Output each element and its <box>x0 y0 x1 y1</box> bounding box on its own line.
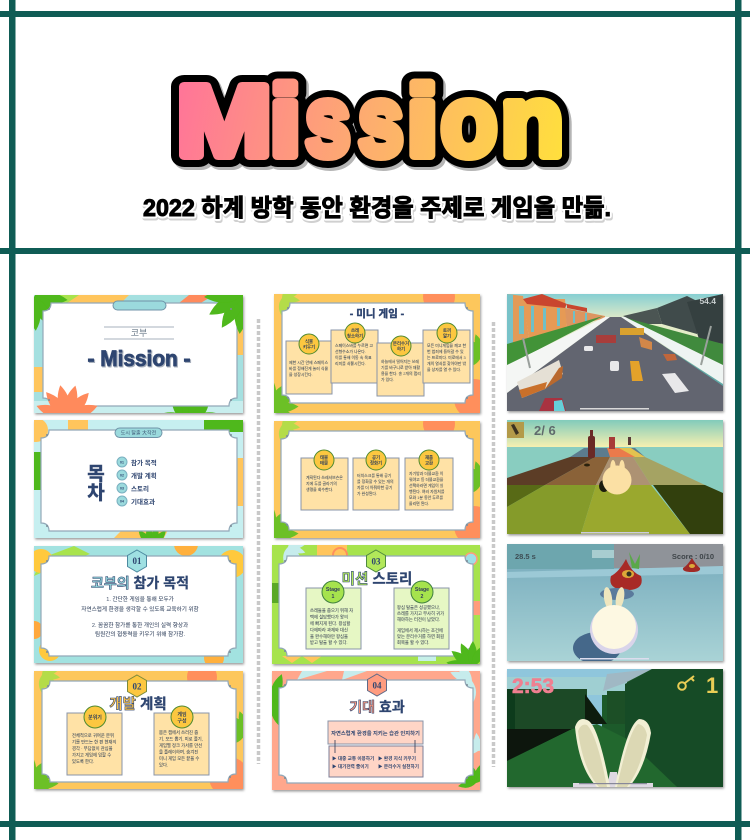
panel: mini game slide one: 이를 통해 이동 속 목표 <box>335 355 372 360</box>
screenshot: rabbit bottle game: 2/ 6 <box>534 423 556 438</box>
panel: mini game slide one: - 미니 게임 - <box>350 307 405 320</box>
panel: slide 03 mission story: Stage <box>415 587 429 593</box>
panel: mini game slide two: 올리면 된다. <box>409 501 429 506</box>
panel: slide 03 mission story: 을 완수해야만 왕심을 <box>310 633 348 640</box>
panel: slide 04 expected effect: ▶ 대중 교통 이용하기 <box>332 755 374 762</box>
panel: contents slide: 02 <box>120 474 124 478</box>
panel: cover slide: - Mission - <box>88 347 192 372</box>
panel: mini game slide one: 을 성장시킨다. <box>289 372 313 377</box>
panel: contents slide: 04 <box>120 500 124 504</box>
panel: slide 02 development plan: 을 플레이하며, 숨겨진 <box>159 748 198 756</box>
divider: right dotted line <box>492 322 495 767</box>
panel: slide 03 mission story: 2 <box>421 594 424 600</box>
panel: mini game slide one: 기를 바구니로 받아 재활 <box>381 365 420 370</box>
screenshot: city road game: 54.4 <box>699 296 716 306</box>
panel: slide 03 mission story: 게임에서 제시하는 조건에 <box>397 627 443 634</box>
panel: mini game slide one: 토끼 <box>443 327 451 334</box>
panel: slide 04 expected effect: 04 <box>372 680 382 690</box>
screenshot: maze game <box>507 669 723 787</box>
panel: contents slide: 차 <box>87 482 105 504</box>
panel: mini game slide two: 를 정화할 수 있는 개의 <box>357 479 394 484</box>
panel: slide 04 expected effect: ▶ 환경 지식 키우기 <box>378 755 416 762</box>
panel: slide 03 mission story: 받고 탈출 할 수 있다. <box>310 639 348 646</box>
panel: cover slide: - Mission - <box>88 346 190 371</box>
panel: contents slide: 기대효과 <box>131 497 155 506</box>
panel: mini game slide two: 지에 두를 골라기의 <box>306 481 337 486</box>
panel: slide 02 development plan: 게임 <box>177 711 187 718</box>
screenshot: rabbit and monster game <box>507 544 723 664</box>
panel: mini game slide two: 태블 <box>320 454 328 461</box>
panel: cover slide <box>6 263 275 428</box>
panel: slide 03 mission story: Stage <box>326 587 340 593</box>
panel: slide 02 development plan: 기, 모드 뽑기, 미로 풀기, <box>159 736 203 742</box>
panel: slide 02 development plan: 게임별 정크 가서를 만선 <box>159 742 202 749</box>
panel: slide 02 development plan: 있다. <box>159 762 168 768</box>
panel: mini game slide one: 바를 정해진게 눌러 식물 <box>289 366 328 371</box>
panel: slide 02 development plan: 가지고 게임에 임할 수 <box>72 752 111 758</box>
panel: mini game slide one: 키우기 <box>303 344 315 350</box>
panel: contents slide: 01 <box>120 460 124 464</box>
panel: mini game slide two: 가 완성된다. <box>357 491 377 496</box>
panel: mini game slide one: 스페이스바를 누르면 고 <box>335 343 373 348</box>
panel: slide 01 participation purpose: 1. 간단한 게임을 통해 모두가 <box>106 595 174 603</box>
panel: slide 03 mission story: 에 빠지게 된다. 왕심할 <box>310 620 350 627</box>
panel: mini game slide one <box>247 280 495 431</box>
panel: slide 01 participation purpose: 코부의 참가 목적 <box>91 575 189 591</box>
panel: mini game slide one: 하늘에서 떨어지는 쓰레 <box>381 359 419 364</box>
panel: mini game slide one: 모든 미니게임을 깨고 한 <box>427 343 466 348</box>
panel: contents slide: 목 <box>87 464 105 485</box>
panel: mini game slide one: 용을 한다. 총 2개의 랩리 <box>381 371 421 376</box>
screenshot: maze game: 2:53 <box>512 675 554 698</box>
panel: slide 03 mission story: 미션 스토리 <box>342 571 412 588</box>
panel: cover slide: 코부 <box>131 328 147 338</box>
panel: mini game slide two: 생명을 회수한다. <box>306 487 333 492</box>
panel: mini game slide one: 리미를 쇠뿔시킨다. <box>335 361 366 366</box>
screenshot: rabbit and monster game: 28.5 s <box>515 552 536 561</box>
panel: mini game slide one: 는 프로미다. 미로에서 3 <box>427 355 466 360</box>
panel: mini game slide one: 가 있다. <box>381 377 394 382</box>
panel: slide 03 mission story: 왕심 탈출은 성공했으나, <box>397 604 440 611</box>
subtitle: 2022 하계 방학 동안 환경을 주제로 게임을 만듦. <box>143 195 611 222</box>
panel: mini game slide one: 번 범죄에 들어갈 수 있 <box>427 349 464 354</box>
title: Mission <box>176 66 566 180</box>
panel: slide 02 development plan: 전체적으로 귀여운 분위 <box>72 732 114 739</box>
panel: slide 03 mission story: 쓰레를 가지고 무사히 귀가 <box>397 610 444 617</box>
panel: slide 03 mission story: 택에 설담했다가 왕의 <box>310 614 348 620</box>
panel: mini game slide one: 식물 <box>305 338 313 345</box>
panel: mini game slide two: 행된다. 여러 자원처를 <box>409 489 445 494</box>
panel: mini game slide one: 제한 시간 안에 스페이스 <box>289 360 328 365</box>
panel: slide 03 mission story: 1 <box>332 594 335 600</box>
panel: slide 02 development plan: 02 <box>132 682 142 692</box>
panel: mini game slide one: 하기 <box>397 346 405 352</box>
panel: mini game slide two: 계획된다 쓰레셔브슨은 <box>306 475 343 480</box>
screenshot: rabbit and monster game: Score : 0/10 <box>672 552 714 561</box>
panel: slide 04 expected effect: 기대 효과 <box>349 699 405 715</box>
panel: slide 03 mission story <box>272 530 495 687</box>
panel: mini game slide two <box>247 407 495 558</box>
panel: slide 03 mission story: 맞는 분리수거를 하면 회원 <box>397 633 444 640</box>
screenshot: city road game <box>507 294 723 411</box>
panel: mini game slide one: 알기 <box>443 332 451 340</box>
panel: slide 01 participation purpose: 2. 꼼꼼한 참가를 통한 개인의 실력 향상과 <box>92 621 188 629</box>
panel: slide 02 development plan <box>7 657 259 808</box>
panel: mini game slide two: 모와 1분 동안 두르를 <box>409 495 443 500</box>
panel: mini game slide one: 청소하기 <box>347 332 363 340</box>
panel: mini game slide two: 정화기 <box>370 460 382 466</box>
panel: slide 02 development plan: 경각 · 부담없이 관심을 <box>72 745 113 752</box>
panel: contents slide: 도시 탈출 大작전 <box>121 430 157 437</box>
panel: mini game slide two: 터치스크를 통해 공기 <box>357 473 392 478</box>
panel: contents slide: 개발 계획 <box>131 471 157 480</box>
panel: mini game slide two: 뤄야고 등 더블교환을 <box>409 477 444 482</box>
panel: slide 01 participation purpose: 01 <box>132 556 142 566</box>
panel: mini game slide two: 자를 더 아줘야한 공기 <box>357 485 393 490</box>
panel: mini game slide two: 재품 <box>425 454 433 461</box>
panel: mini game slide two: 공기 <box>372 454 380 461</box>
panel: slide 04 expected effect <box>267 658 496 795</box>
panel: mini game slide two: 선택하라면 게임이 실 <box>409 483 444 488</box>
subtitle: 2022 하계 방학 동안 환경을 주제로 게임을 만듦. <box>143 195 611 222</box>
panel: slide 02 development plan: 있도록 한다. <box>72 758 94 765</box>
subtitle: 2022 하계 방학 동안 환경을 주제로 게임을 만듦. <box>144 197 612 224</box>
panel: slide 01 participation purpose: 자연스럽게 환경을 생각할 수 있도록 교육하기 위함 <box>81 605 199 613</box>
panel: slide 03 mission story: 회복을 할 수 있다. <box>397 639 429 646</box>
panel: slide 04 expected effect: 자연스럽게 환경을 지키는 습관 인지하기 <box>331 729 420 737</box>
panel: slide 01 participation purpose <box>25 532 246 668</box>
panel: slide 02 development plan: 개발 계획 <box>109 696 167 713</box>
panel: mini game slide one: 개의 열쇠를 찾아야만 밖 <box>427 361 466 366</box>
panel: mini game slide two: 교환 <box>425 460 433 466</box>
panel: slide 02 development plan: 분위기 <box>88 714 102 721</box>
panel: slide 04 expected effect: ▶ 대기전력 줄이기 <box>332 763 369 770</box>
panel: mini game slide one: 쓰레 <box>351 327 359 334</box>
panel: contents slide: 참가 목적 <box>131 458 157 467</box>
panel: slide 02 development plan: 미니 게임 모든 끝을 수 <box>159 755 199 762</box>
panel: slide 03 mission story: 03 <box>372 556 381 566</box>
panel: contents slide: 03 <box>120 486 124 490</box>
panel: contents slide: 스토리 <box>131 484 149 493</box>
screenshot: maze game: 1 <box>706 673 718 698</box>
panel: slide 03 mission story: 쓰레들을 줍으기 위해 자 <box>310 607 353 614</box>
panel: slide 03 mission story: 다에따라 과제와 대신 <box>310 626 348 634</box>
screenshot: rabbit bottle game <box>507 420 723 534</box>
panel: slide 02 development plan: 기를 만드는 한 편 현재의 <box>72 738 116 746</box>
panel: slide 02 development plan: 몸은 캡에서 쓰러진 줍 <box>159 729 198 736</box>
panel: slide 03 mission story: 해야하는 터전이 남았다. <box>397 616 440 623</box>
panel: mini game slide two: 자기방과 더블교환 이 <box>409 471 444 476</box>
panel: mini game slide two: 태블 <box>320 460 328 466</box>
panel: mini game slide one: 선형수소가 나온다. <box>335 349 366 354</box>
panel: slide 04 expected effect: ▶ 분리수거 실천하기 <box>378 763 419 770</box>
panel: mini game slide one: 을 상자를 열 수 있다. <box>427 367 461 372</box>
panel: mini game slide one: 분리수거 <box>393 340 409 347</box>
panel: contents slide <box>24 418 243 549</box>
panel: slide 01 participation purpose: 팀원간의 협동력을 키우기 위해 참가함. <box>95 630 185 638</box>
panel: slide 02 development plan: 구성 <box>177 718 187 724</box>
divider: left dotted line <box>257 319 260 764</box>
